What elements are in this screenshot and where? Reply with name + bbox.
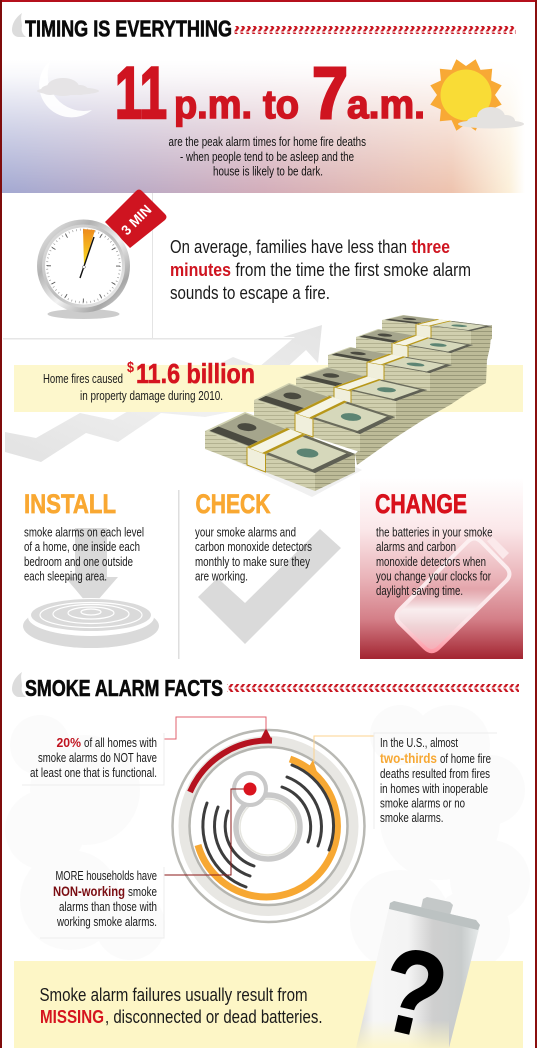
arc: 20 percent — [190, 728, 272, 792]
callout: 20 percent: at least one that is functional. — [30, 766, 157, 780]
callout: non-working: alarms than those with — [59, 900, 157, 914]
callout: 20 percent — [22, 733, 164, 785]
text: install details: each sleeping area. — [24, 570, 107, 584]
text: change details: you change your clocks for — [376, 570, 491, 584]
text: three minutes to escape: sounds to escape a fire. — [170, 283, 330, 303]
text: property damage: 11.6 billion — [136, 358, 255, 389]
section: three minutes — [37, 190, 471, 319]
text: three minutes to escape: from the time the first smoke alarm — [236, 260, 471, 280]
sound waves — [203, 765, 334, 887]
section: property damage — [14, 315, 523, 497]
arc: two thirds — [198, 759, 337, 897]
text: change details: daylight saving time. — [376, 584, 463, 598]
heading: timing is everything — [12, 13, 516, 42]
text: change details: the batteries in your smoke — [376, 526, 493, 540]
text: check details: are working. — [195, 570, 248, 584]
heading: timing is everything: TIMING IS EVERYTHING — [25, 16, 232, 42]
icon: stopwatch — [37, 220, 130, 319]
money step 1 — [205, 412, 355, 491]
callout: two thirds: in homes with inoperable — [380, 782, 488, 796]
callout: 20 percent: of all homes with — [84, 736, 157, 750]
text: check details — [195, 526, 312, 584]
text: battery failures — [40, 984, 322, 1027]
text: check details: carbon monoxide detectors — [195, 540, 312, 554]
text: check details: monthly to make sure they — [195, 555, 311, 569]
callout: non-working — [40, 867, 164, 938]
headline: peak alarm times: 7 — [312, 53, 348, 134]
text: property damage: Home fires caused — [43, 372, 123, 386]
callout: 20 percent: smoke alarms do NOT have — [38, 751, 157, 765]
heading: smoke alarm facts: SMOKE ALARM FACTS — [25, 675, 223, 701]
section: battery failures — [14, 897, 523, 1048]
text: battery failures: , disconnected or dead batteries. — [105, 1006, 322, 1027]
panel: sky banner — [2, 60, 525, 193]
heading: smoke alarm facts — [12, 672, 519, 701]
text: change details — [376, 526, 493, 598]
panel: check — [195, 489, 341, 644]
background arrow: rising graph — [5, 325, 322, 462]
text: three minutes to escape: three — [412, 237, 450, 257]
text: three minutes to escape: minutes — [170, 260, 231, 280]
icon: check mark — [198, 529, 341, 644]
text: install details — [24, 526, 144, 584]
text: peak alarm description — [168, 135, 366, 178]
text: peak alarm description: are the peak alarm times for home fire deaths — [168, 135, 366, 149]
alarm centre — [234, 773, 300, 859]
headline: peak alarm times: p.m. — [174, 83, 252, 127]
money step 3 — [296, 367, 427, 419]
callout: two thirds: of home fire — [440, 752, 491, 766]
headline: peak alarm times: a.m. — [347, 83, 425, 127]
money step 6 — [382, 315, 492, 345]
icon: red light — [244, 782, 256, 796]
band: pale yellow — [14, 961, 523, 1048]
diagram: smoke alarm — [172, 728, 364, 922]
icon: 3 min tag — [105, 190, 166, 248]
headline: peak alarm times: 11 — [115, 53, 167, 134]
text: check details: your smoke alarms and — [195, 526, 296, 540]
text: install details: of a home, one inside each — [24, 540, 140, 554]
text: battery failures: Smoke alarm failures usually result from — [40, 984, 308, 1005]
icon: arrow on target — [23, 528, 159, 648]
headline: peak alarm times — [115, 53, 425, 134]
section: smoke alarm facts — [5, 672, 530, 970]
money step 5 — [356, 329, 473, 369]
illustration: stacks of money — [205, 315, 492, 497]
callout: non-working: working smoke alarms. — [56, 915, 157, 929]
callout: non-working: smoke — [128, 885, 157, 899]
band: pale yellow — [14, 365, 523, 412]
money step 2 — [254, 383, 395, 452]
callout: two thirds — [374, 733, 497, 829]
text: change details: alarms and carbon — [376, 540, 456, 554]
section: timing is everything — [2, 13, 525, 193]
panel: install — [23, 489, 159, 648]
text: peak alarm description: house is likely to be dark. — [213, 164, 323, 178]
money step 4 — [328, 347, 452, 391]
icon: 3 min tag: 3 MIN — [118, 201, 155, 238]
headline: peak alarm times: to — [263, 83, 299, 127]
icon: battery with question mark — [356, 897, 480, 1048]
heading: change: CHANGE — [375, 489, 467, 519]
text: install details: smoke alarms on each level — [24, 526, 144, 540]
callout: two thirds: smoke alarms. — [380, 811, 444, 825]
text: property damage — [43, 358, 255, 403]
text: peak alarm description: - when people tend to be asleep and the — [180, 150, 354, 164]
callout: non-working: NON-working — [53, 884, 125, 899]
text: install details: bedroom and one outside — [24, 555, 133, 569]
panel: change — [360, 478, 523, 659]
text: battery failures: MISSING — [40, 1006, 104, 1027]
callout: two thirds: deaths resulted from fires — [380, 767, 490, 781]
background: smoke clouds — [5, 705, 530, 970]
icon: crescent moon and cloud — [37, 60, 99, 117]
text: three minutes to escape: On average, families have less than — [170, 237, 407, 257]
icon: sun and cloud — [430, 59, 524, 131]
callout: two thirds: two-thirds — [380, 751, 437, 766]
callout: two thirds: In the U.S., almost — [380, 736, 458, 750]
callout: non-working: MORE households have — [56, 869, 157, 883]
text: property damage: in property damage during 2010. — [80, 389, 223, 403]
icon: battery — [396, 537, 510, 651]
heading: check: CHECK — [196, 489, 271, 519]
text: three minutes to escape — [170, 237, 471, 303]
text: change details: monoxide detectors when — [376, 555, 486, 569]
heading: install: INSTALL — [24, 489, 116, 519]
connector lines — [164, 717, 374, 875]
callout: two thirds: smoke alarms or no — [380, 796, 465, 810]
callout: 20 percent: 20% — [56, 735, 81, 750]
text: property damage: $ — [127, 359, 135, 376]
